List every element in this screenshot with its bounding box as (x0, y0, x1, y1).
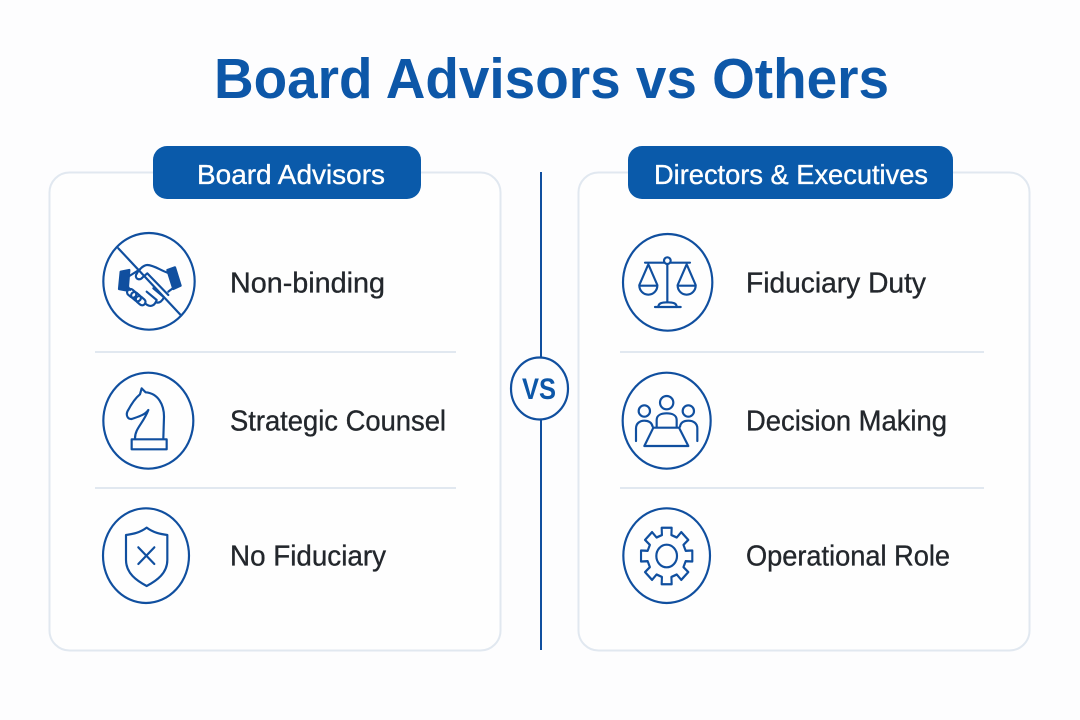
vs divider: VS (522, 373, 556, 406)
panel: board advisors (50, 146, 500, 650)
icon: shield with x (103, 508, 189, 603)
label: non-binding: Non-binding (230, 268, 385, 300)
label: no fiduciary: No Fiduciary (230, 540, 386, 572)
icon: people around a table (623, 373, 711, 469)
heading: directors and executives (628, 146, 953, 199)
heading: board advisors (153, 146, 421, 199)
label: fiduciary duty: Fiduciary Duty (746, 268, 926, 300)
heading: directors and executives: Directors & Executives (654, 159, 928, 190)
icon: gear (623, 508, 710, 603)
label: strategic counsel: Strategic Counsel (230, 406, 446, 438)
label: decision making: Decision Making (746, 406, 947, 438)
icon: scales of justice (623, 234, 712, 331)
icon: chess knight (103, 373, 193, 469)
heading: board advisors: Board Advisors (197, 159, 385, 190)
title: Board Advisors vs Others (214, 47, 889, 111)
label: operational role: Operational Role (746, 540, 950, 572)
vs divider (511, 172, 568, 650)
icon: crossed-out handshake (103, 233, 195, 330)
panel: directors and executives (578, 146, 1030, 650)
